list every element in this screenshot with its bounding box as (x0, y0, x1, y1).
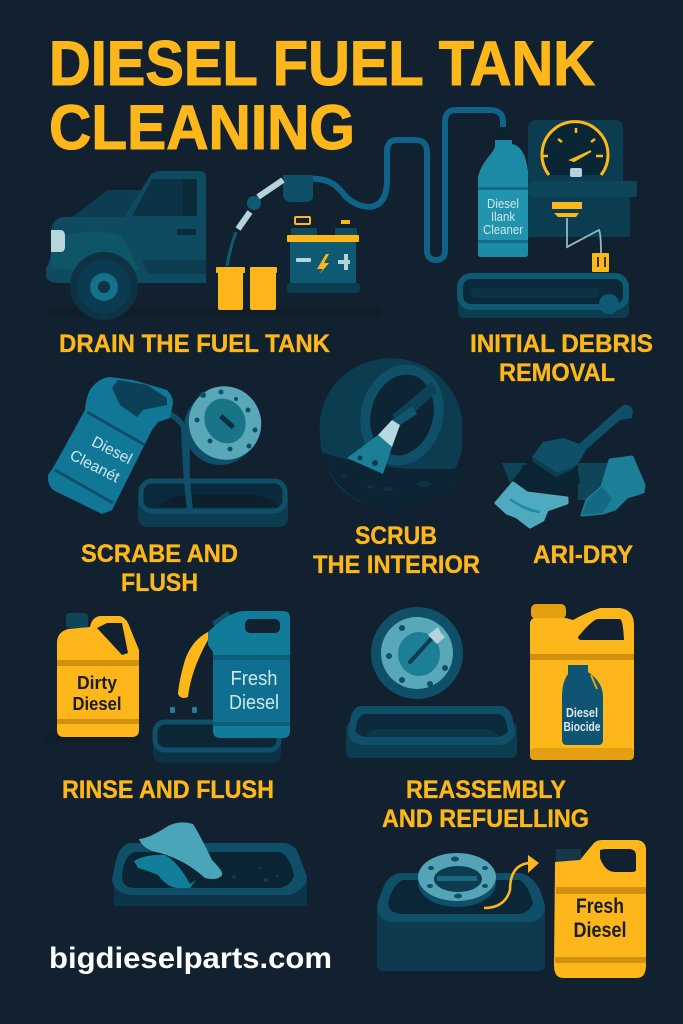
heading: scrabe and flush (81, 540, 238, 597)
icon: biocide jug: Diesel (566, 705, 598, 720)
icon: drain buckets (216, 267, 277, 310)
ground shadow under truck (48, 306, 383, 318)
icon: dirty diesel jug (57, 613, 139, 737)
title (49, 29, 595, 163)
icon: pickup truck (46, 171, 206, 320)
ground shadow under dirty jug (43, 733, 143, 743)
heading: scrub the interior: SCRUB (355, 522, 437, 550)
footer website: bigdieselparts.com (49, 942, 332, 975)
icon: fresh diesel jug: Diesel (229, 692, 279, 714)
icon: pouring cleaner bottle: Cleanét (67, 447, 123, 487)
hose (370, 110, 503, 260)
icon: flange plate (176, 373, 274, 473)
icon: cleaner bottle: Ilank (491, 210, 516, 224)
icon: tank 2 (138, 424, 288, 527)
heading: initial debris removal (470, 330, 653, 387)
icon: cleaner bottle: Cleaner (483, 223, 523, 237)
heading: reassembly and refuelling (382, 776, 589, 833)
icon: scrub brush in tank interior (320, 358, 462, 510)
heading: reassembly and refuelling: AND REFUELLING (382, 805, 589, 833)
icon: open tank (346, 706, 517, 758)
icon: tank 1 (458, 276, 629, 318)
icon: battery (287, 217, 360, 293)
icon: flange with wrench (371, 607, 463, 699)
icon: biocide jug (530, 604, 634, 760)
icon: dirty diesel jug: Dirty (77, 672, 118, 693)
icon: cleaner bottle: Diesel (487, 197, 519, 211)
heading: scrub the interior: THE INTERIOR (313, 551, 480, 579)
icon: tank with rag (112, 822, 307, 906)
icon: biocide jug: Biocide (564, 719, 600, 734)
heading: initial debris removal: REMOVAL (499, 359, 615, 387)
heading: rinse and flush: RINSE AND FLUSH (62, 776, 274, 804)
icon: rinse tank (153, 707, 281, 763)
icon: fresh diesel jug 2: Fresh (576, 895, 624, 918)
icon: fuel filter and plug (552, 202, 609, 272)
icon: fresh diesel jug (178, 611, 290, 738)
heading: drain the fuel tank: DRAIN THE FUEL TANK (59, 330, 330, 358)
icon: tank with gasket ring (377, 853, 545, 971)
heading: scrabe and flush: SCRABE AND (81, 540, 238, 568)
icon: fuel nozzle and drain line (227, 175, 370, 266)
icon: fresh diesel jug 2: Diesel (574, 919, 626, 942)
arrow (484, 855, 539, 908)
heading: reassembly and refuelling: REASSEMBLY (406, 776, 566, 804)
heading: initial debris removal: INITIAL DEBRIS (470, 330, 653, 358)
title: DIESEL FUEL TANK (49, 29, 595, 99)
icon: pouring cleaner bottle (48, 377, 187, 514)
icon: cleaner bottle (478, 128, 528, 257)
icon: dashboard gauge panel (528, 120, 637, 237)
heading: scrabe and flush: FLUSH (121, 569, 198, 597)
title: CLEANING (49, 93, 355, 163)
icon: broom and rags (496, 405, 644, 527)
icon: fresh diesel jug: Fresh (230, 668, 278, 690)
icon: dirty diesel jug: Diesel (72, 693, 122, 714)
heading: scrub the interior (313, 522, 480, 579)
heading: air-dry: ARI-DRY (533, 541, 633, 569)
icon: fresh diesel jug 2 (554, 840, 646, 978)
icon: pouring cleaner bottle: Diesel (89, 433, 135, 468)
